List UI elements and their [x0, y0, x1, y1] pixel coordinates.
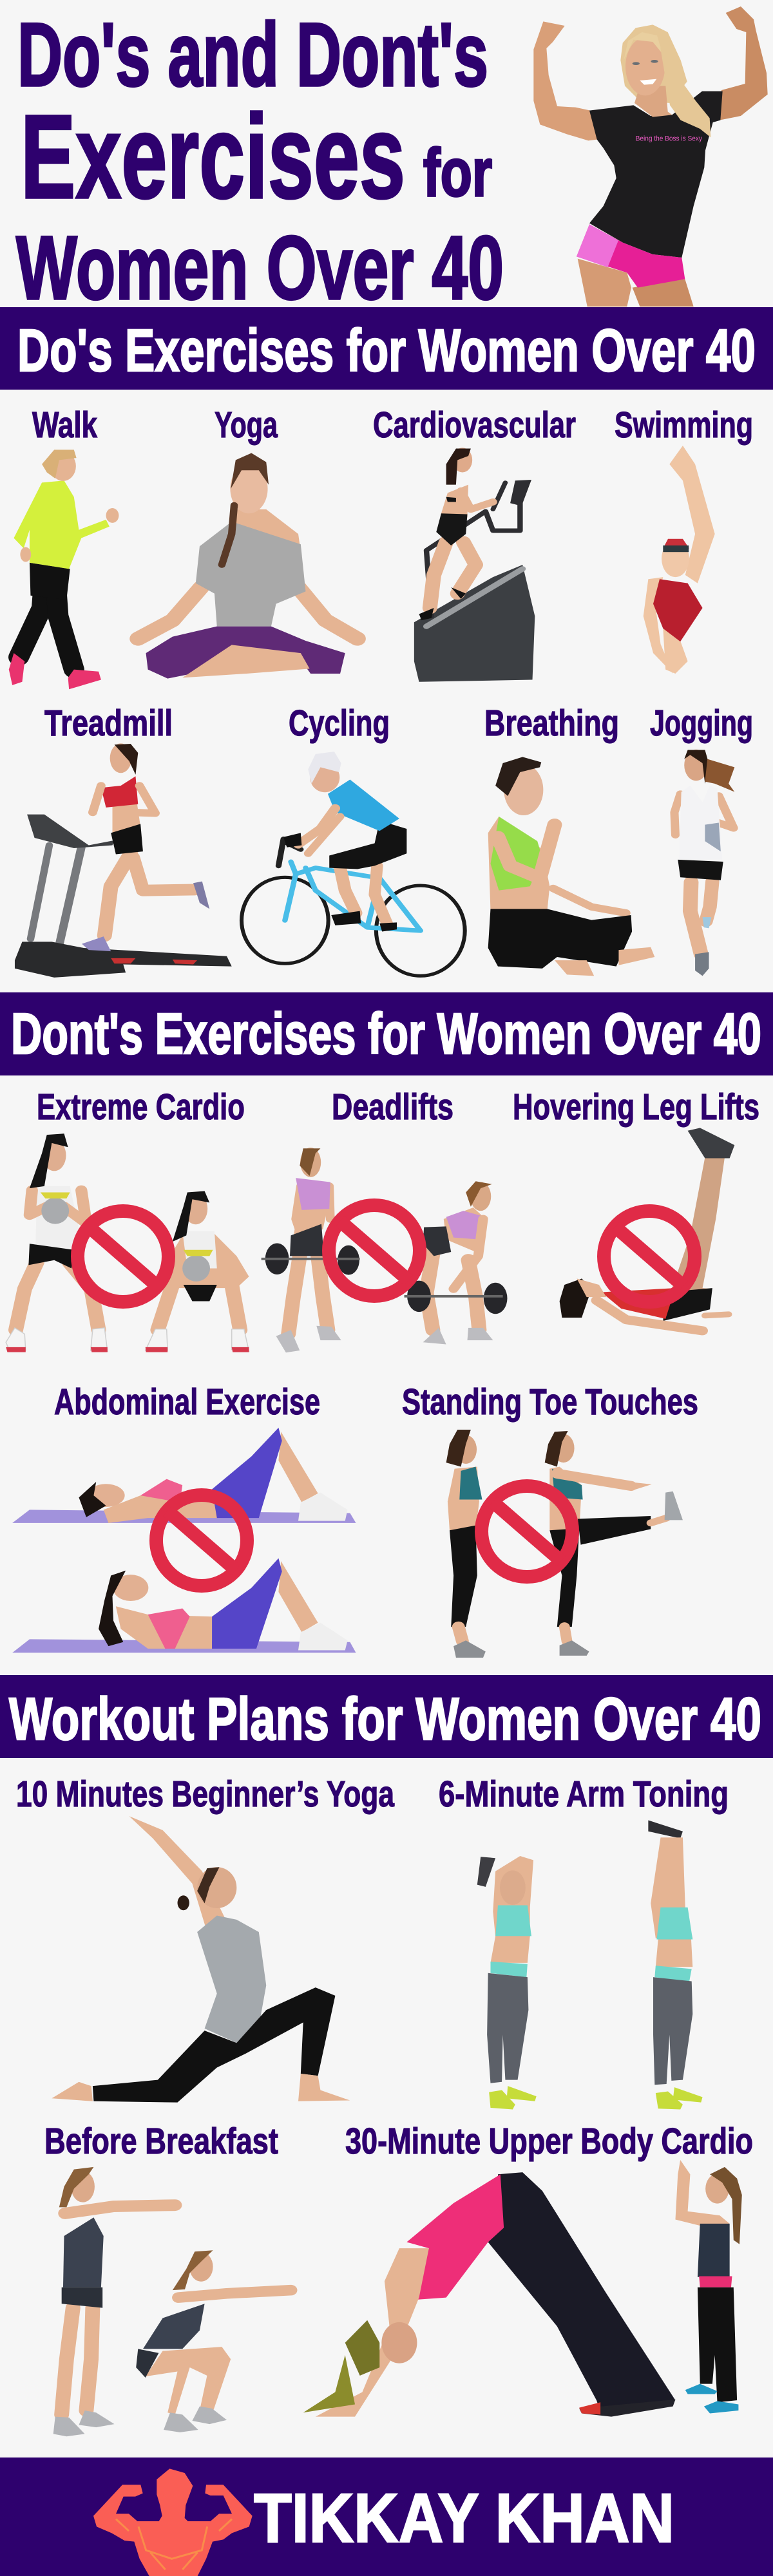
no sign icons: [77, 1206, 694, 1586]
figure: yoga: [138, 453, 358, 679]
footer: TIKKAY KHAN: [254, 2479, 674, 2557]
figure: arm toning, bent arms: [477, 1856, 537, 2110]
exercise labels: first row: Yoga: [215, 404, 278, 446]
panel: do's exercises: [0, 307, 773, 978]
figure: standing toe touches: [446, 1430, 683, 1658]
title: Do's and Dont's: [17, 4, 488, 105]
figure: jogging: [674, 750, 734, 976]
figure: smiling woman flexing arms: [533, 6, 768, 307]
exercise labels: first row: Cardiovascular: [373, 404, 576, 446]
figure: abdominal exercise: [12, 1428, 356, 1653]
exercise labels: dont's first row: [37, 1086, 759, 1128]
figure: cycling: [242, 752, 465, 976]
figure: upper body cardio downward dog: [303, 2172, 675, 2417]
figure: deadlifts: [262, 1148, 507, 1352]
exercise labels: second row: Cycling: [289, 703, 390, 744]
title: Exercises: [21, 91, 405, 223]
figure: smiling woman flexing arms: Being the Boss is Sexy: [636, 135, 703, 142]
figure: arm toning, straight arms: [648, 1821, 703, 2110]
icon: muscle logo: [93, 2468, 253, 2576]
exercise labels: second row: [44, 703, 753, 744]
exercise labels: first row: [32, 404, 753, 446]
exercise labels: dont's first row: Deadlifts: [332, 1086, 453, 1128]
figure: before breakfast squat: [53, 2167, 291, 2436]
exercise labels: first row: Walk: [32, 404, 97, 446]
footer: [0, 2458, 773, 2576]
exercise labels: dont's second row: [54, 1381, 698, 1423]
title: for: [423, 135, 492, 211]
exercise labels: dont's first row: Extreme Cardio: [37, 1086, 245, 1128]
figure: upper body cardio standing: [675, 2160, 742, 2414]
workout labels: first row: 10 Minutes Beginner’s Yoga: [16, 1774, 395, 1815]
workout labels: second row: [44, 2121, 753, 2162]
panel: workout plans: [0, 1675, 773, 2436]
figure: treadmill: [15, 743, 232, 978]
figure: breathing: [488, 757, 654, 976]
exercise labels: dont's second row: Abdominal Exercise: [54, 1381, 320, 1423]
panel: dont's exercises: [0, 992, 773, 1658]
figure: cardiovascular stepper: [414, 448, 535, 682]
exercise labels: second row: Treadmill: [44, 703, 173, 744]
figure: hovering leg lifts: [560, 1128, 734, 1331]
workout labels: first row: [16, 1774, 729, 1815]
figure: beginner's yoga lunge: [52, 1816, 350, 2103]
title: [16, 4, 504, 318]
exercise labels: second row: Breathing: [484, 703, 619, 744]
figure: swimming: [644, 446, 715, 674]
figure: extreme cardio kettlebell: [6, 1133, 249, 1352]
figure: walk: [9, 450, 119, 689]
title: Women Over 40: [16, 217, 504, 318]
workout labels: second row: Before Breakfast: [44, 2121, 278, 2162]
